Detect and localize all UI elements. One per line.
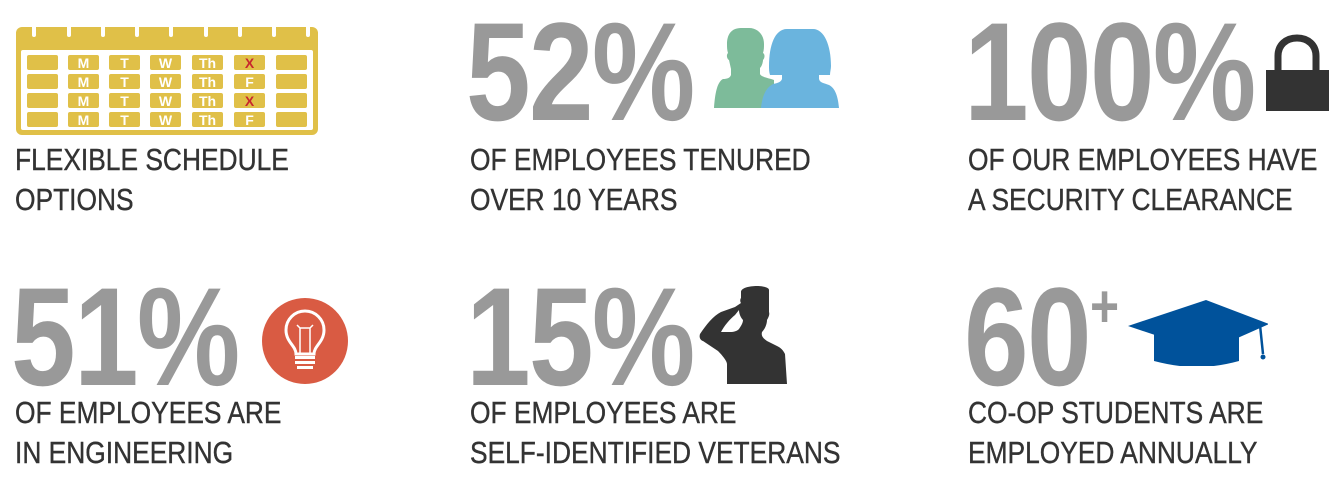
icon: calendar: W: [159, 55, 173, 71]
icon: calendar: [16, 27, 318, 135]
stat: 15%: 15%: [466, 258, 694, 415]
caption: tenured: OVER 10 YEARS: [470, 182, 677, 217]
caption: co-op: [968, 395, 1263, 470]
caption: engineering: [15, 395, 282, 470]
icon: calendar: M: [78, 93, 89, 109]
caption: clearance: [968, 142, 1317, 217]
caption: flexible schedule: OPTIONS: [15, 182, 134, 217]
icon: people: [714, 28, 839, 108]
caption: co-op: EMPLOYED ANNUALLY: [968, 435, 1257, 470]
stat: 60+: 60+: [964, 258, 1117, 415]
icon: calendar: W: [159, 93, 173, 109]
caption: veterans: [470, 395, 840, 470]
icon: calendar: T: [120, 112, 129, 128]
icon: calendar: X: [245, 93, 255, 109]
icon: calendar: Th: [199, 55, 216, 71]
caption: co-op: CO-OP STUDENTS ARE: [968, 395, 1263, 430]
caption: clearance: A SECURITY CLEARANCE: [968, 182, 1293, 217]
stat: 51%: 51%: [11, 258, 239, 415]
icon: calendar: X: [245, 55, 255, 71]
icon: calendar: T: [120, 93, 129, 109]
icon: graduation cap: [1128, 300, 1268, 366]
caption: tenured: [470, 142, 811, 217]
caption: engineering: IN ENGINEERING: [15, 435, 233, 470]
icon: calendar: W: [159, 112, 173, 128]
caption: veterans: OF EMPLOYEES ARE: [470, 395, 737, 430]
icon: calendar: T: [120, 74, 129, 90]
icon: calendar: Th: [199, 74, 216, 90]
icon: calendar: F: [245, 74, 254, 90]
icon: calendar: W: [159, 74, 173, 90]
caption: flexible schedule: FLEXIBLE SCHEDULE: [15, 142, 289, 177]
caption: tenured: OF EMPLOYEES TENURED: [470, 142, 811, 177]
caption: veterans: SELF-IDENTIFIED VETERANS: [470, 435, 840, 470]
caption: flexible schedule: [15, 142, 289, 217]
icon: saluting soldier: [700, 286, 787, 384]
caption: engineering: OF EMPLOYEES ARE: [15, 395, 282, 430]
icon: calendar: M: [78, 55, 89, 71]
icon: calendar: M: [78, 112, 89, 128]
icon: calendar: Th: [199, 112, 216, 128]
icon: calendar: F: [245, 112, 254, 128]
icon: calendar: Th: [199, 93, 216, 109]
caption: clearance: OF OUR EMPLOYEES HAVE: [968, 142, 1317, 177]
icon: calendar: T: [120, 55, 129, 71]
icon: lock: [1266, 34, 1329, 111]
icon: calendar: M: [78, 74, 89, 90]
icon: light bulb: [262, 298, 348, 384]
